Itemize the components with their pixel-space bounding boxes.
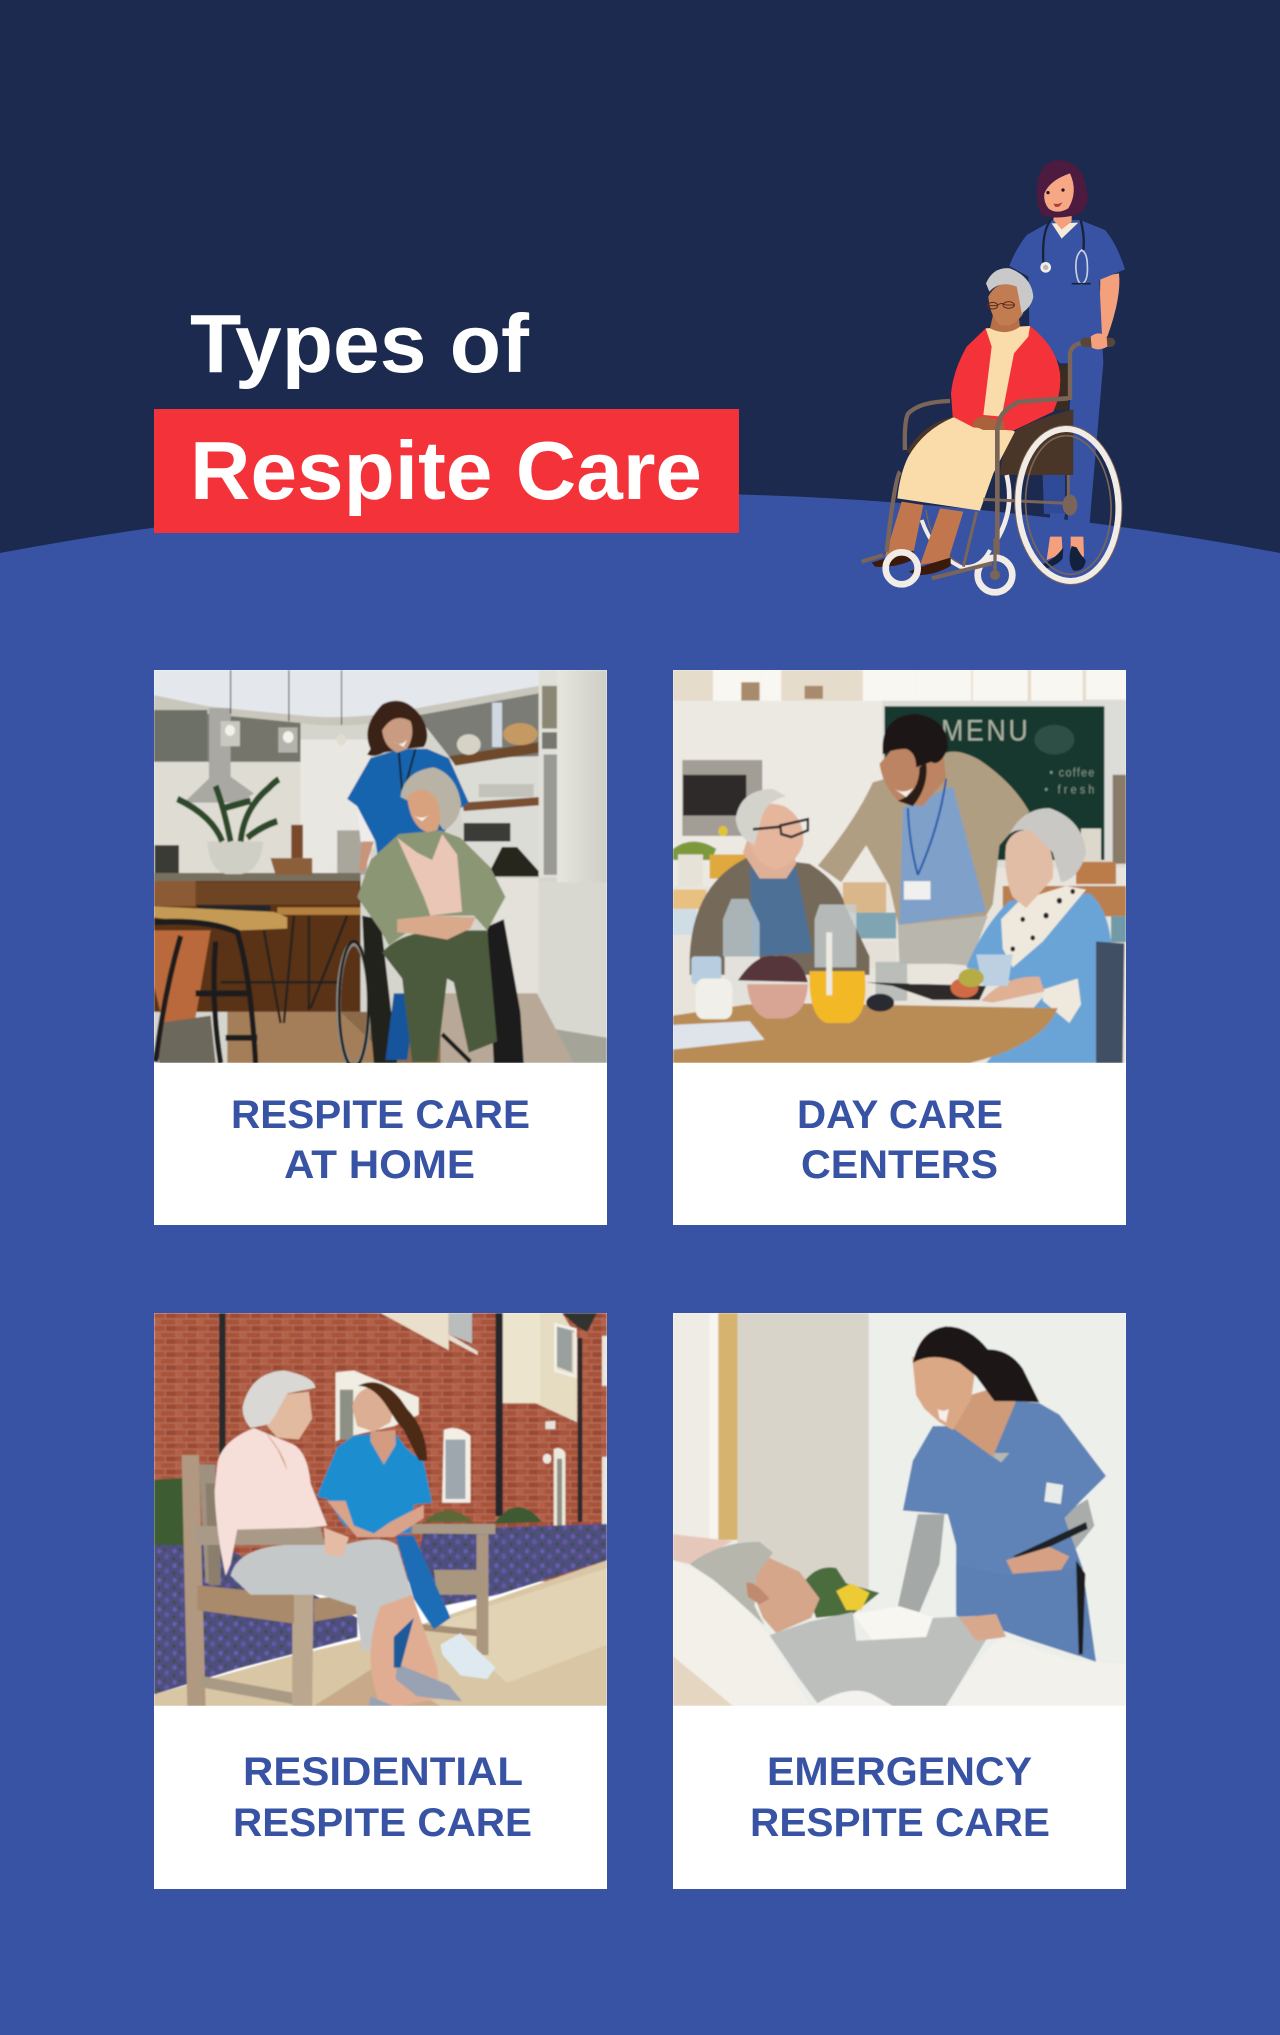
label: RESPITE CARE: [750, 1801, 1050, 1845]
heading banner: Respite Care: Respite Care: [190, 424, 702, 517]
page background: blue curved panel: [0, 493, 1280, 2035]
label: [233, 1750, 532, 1845]
label: RESPITE CARE: [233, 1801, 532, 1845]
card background: [154, 1313, 607, 1889]
label: [231, 1093, 530, 1187]
panel: residential respite care: [154, 1313, 607, 1889]
card background: [673, 1313, 1126, 1889]
label: CENTERS: [801, 1143, 998, 1187]
panel: emergency respite care: [673, 1313, 1126, 1889]
photo: carer with two seniors at a table: [673, 670, 1126, 1063]
label: [750, 1750, 1050, 1845]
label: RESIDENTIAL: [243, 1750, 523, 1794]
panel: respite care at home: [154, 670, 607, 1225]
label: AT HOME: [284, 1143, 475, 1187]
photo: carer with two seniors at a table: MENU: [941, 713, 1028, 747]
heading banner: Respite Care: [154, 409, 739, 533]
heading: Types of: Types of: [190, 297, 529, 390]
card background: [154, 670, 607, 1225]
icon: nurse pushing elderly woman in wheelchair: [862, 160, 1125, 592]
label: EMERGENCY: [767, 1750, 1032, 1794]
wheelchair frame and wheels: [862, 333, 1125, 592]
nurse figure: [1009, 160, 1125, 571]
label: DAY CARE: [797, 1093, 1003, 1137]
label: RESPITE CARE: [231, 1093, 530, 1137]
photo: carer with two seniors at a table: • coffee: [1049, 767, 1094, 780]
photo: carer with two seniors at a table: • fresh: [1044, 784, 1094, 796]
elderly woman figure: [872, 268, 1060, 575]
photo: carer and woman on a garden bench: [154, 1313, 607, 1706]
card background: [673, 670, 1126, 1225]
photo: nurse beside a patient in bed: [673, 1313, 1126, 1706]
label: [797, 1093, 1003, 1187]
photo: nurse and woman in wheelchair in a kitchen: [154, 670, 607, 1063]
wheelchair back and seat: [907, 365, 1073, 567]
panel: day care centers: [673, 670, 1126, 1225]
header background: navy: [0, 0, 1280, 600]
title: [154, 297, 739, 533]
